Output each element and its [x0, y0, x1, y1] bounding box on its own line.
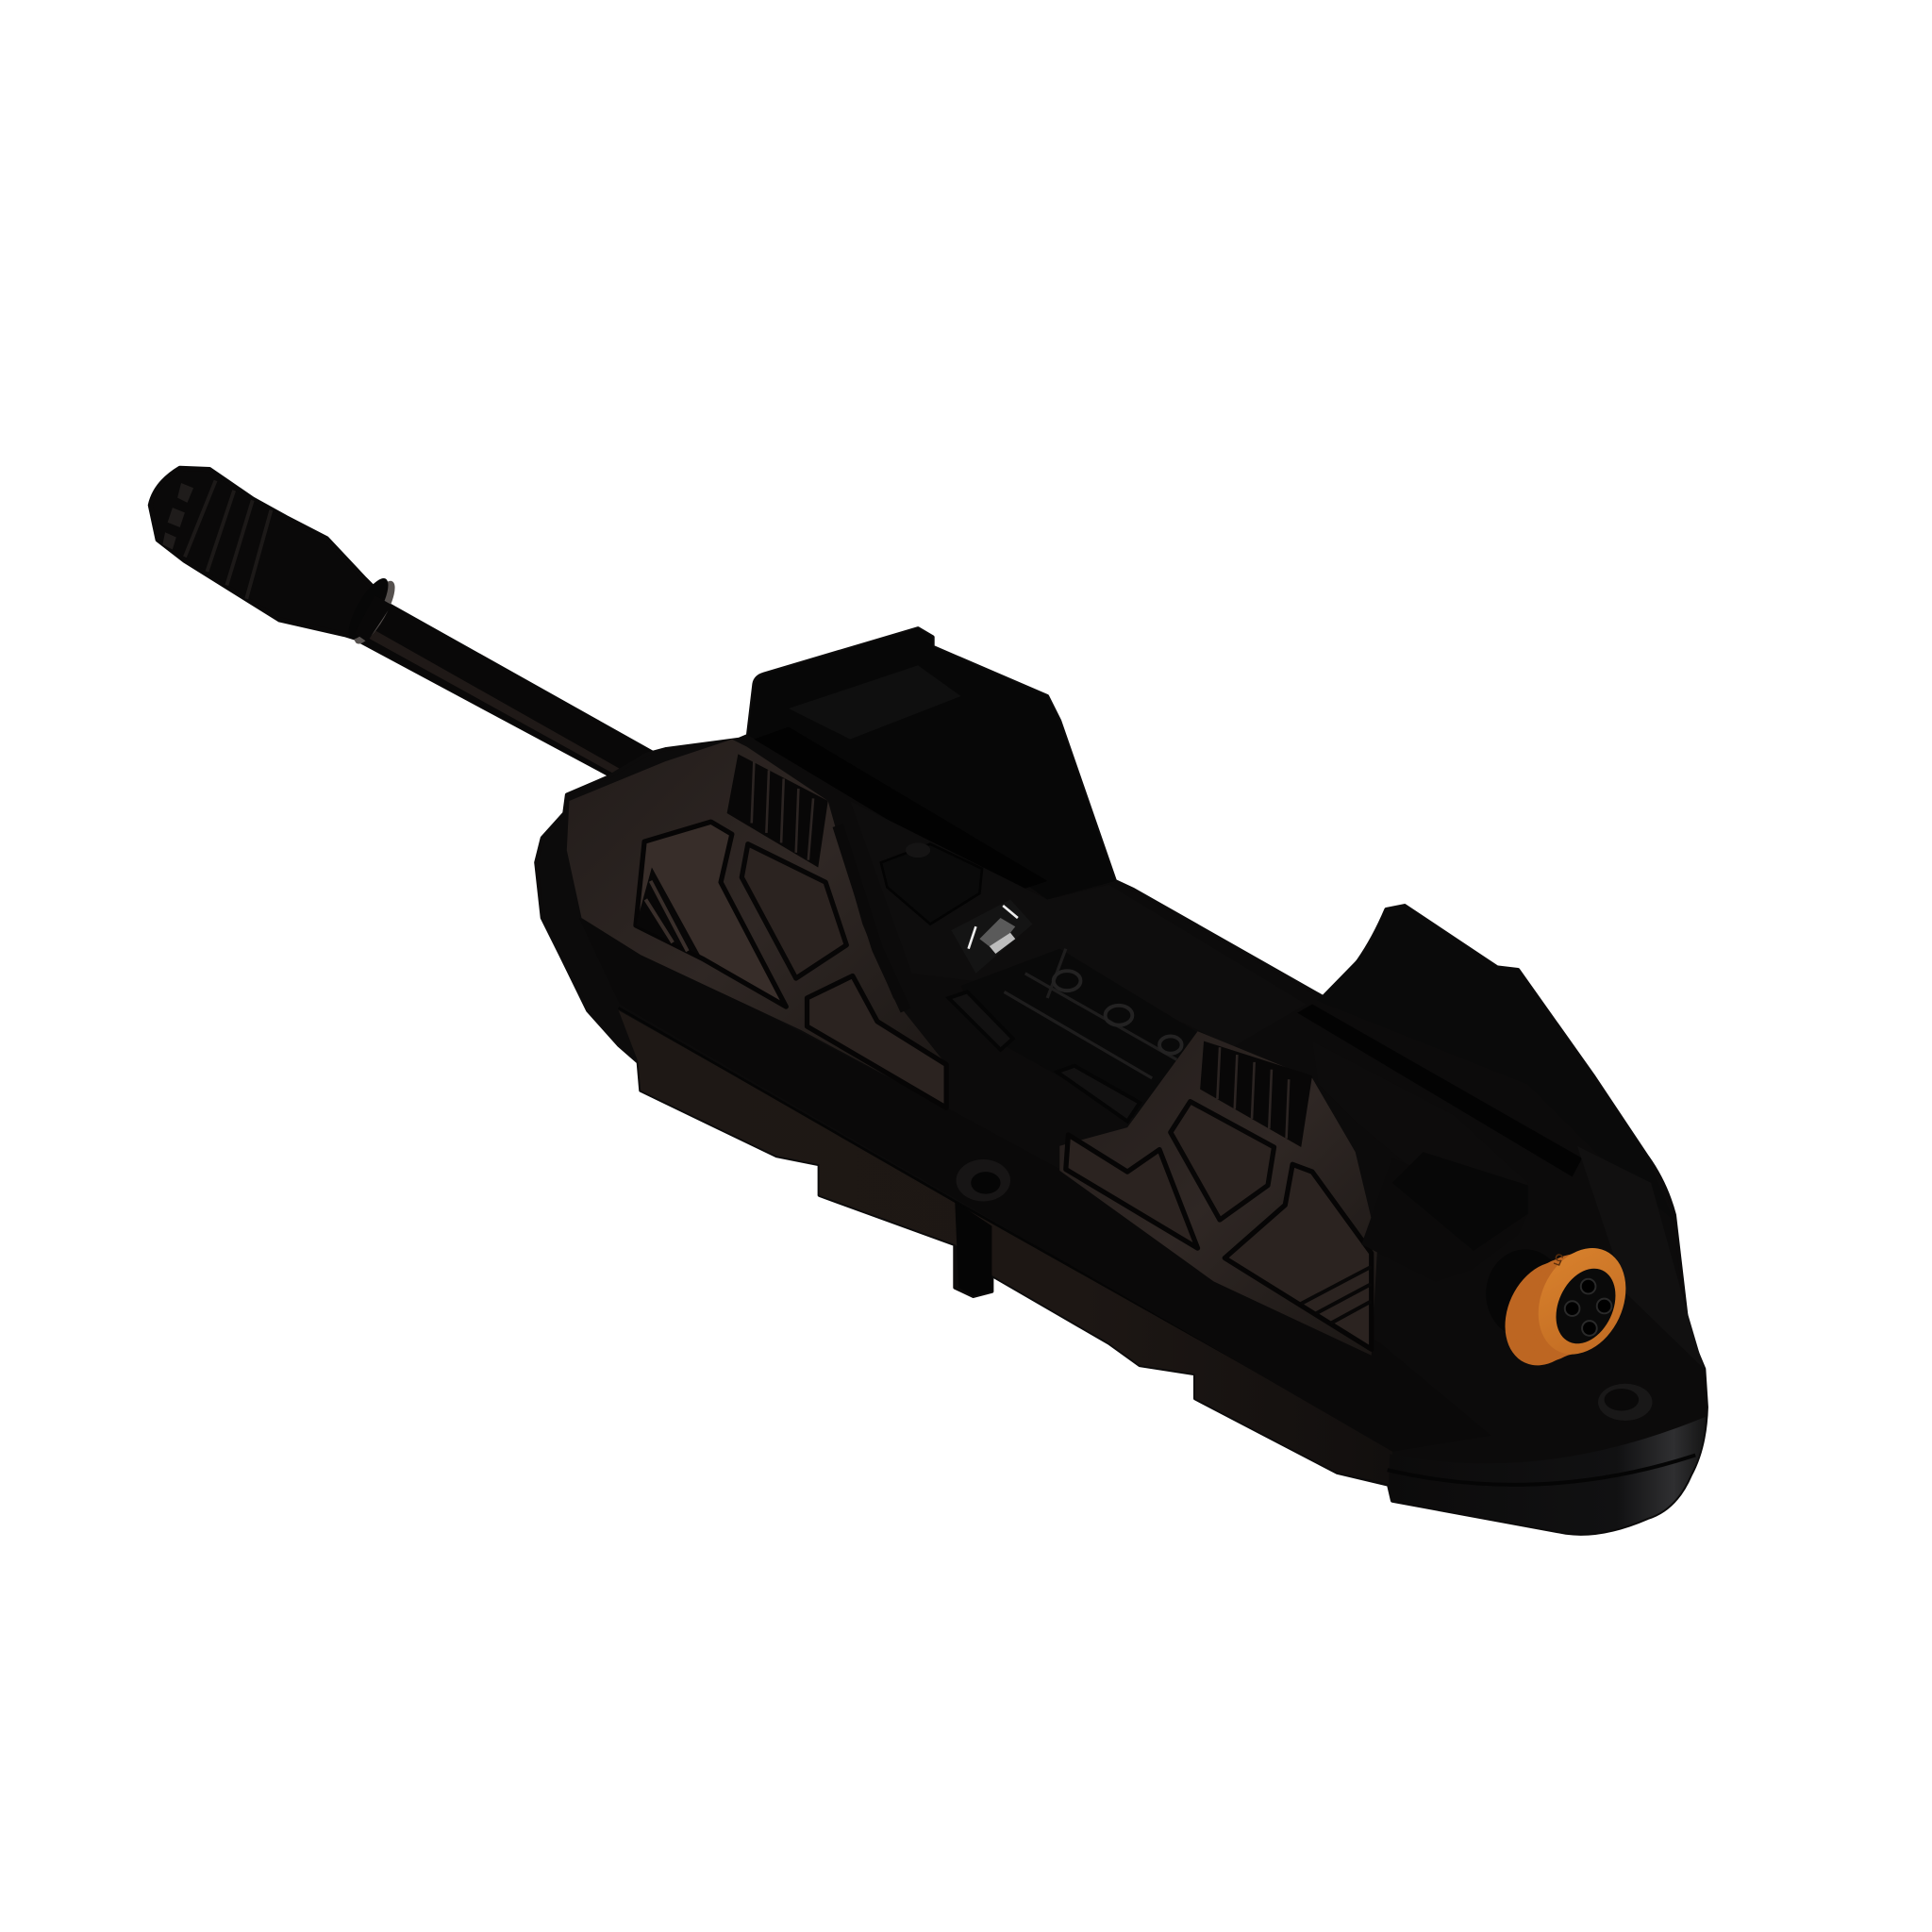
right panel hexagon: [1171, 1102, 1274, 1220]
left panel hexagon with stripes: [636, 822, 786, 1007]
centre terminal grid: [949, 949, 1201, 1122]
left brown side panel: [567, 740, 946, 1108]
cable connector: [150, 468, 402, 649]
lower right tip: [1388, 1417, 1706, 1534]
right panel small piece: [1066, 1135, 1198, 1248]
right top clamp block: [1297, 906, 1704, 1369]
right panel large piece with stripes: [1224, 1164, 1372, 1349]
black side band: [579, 918, 1491, 1452]
orange round connector: [1486, 1234, 1642, 1379]
mound plate: [881, 844, 982, 924]
centre metal contact: [951, 899, 1033, 974]
right brown side panel: [1059, 1031, 1377, 1356]
side mounting lug: [955, 1159, 1010, 1296]
left top clamp block: [748, 628, 1306, 1047]
connector marking: 5: [1551, 1249, 1566, 1269]
right mounting hole: [1598, 1384, 1653, 1421]
cable: [355, 600, 659, 778]
left panel lower piece: [808, 975, 946, 1108]
lower skirt: [619, 1008, 1392, 1485]
left panel centre hexagon: [741, 844, 846, 978]
main body silhouette: [536, 628, 1707, 1534]
